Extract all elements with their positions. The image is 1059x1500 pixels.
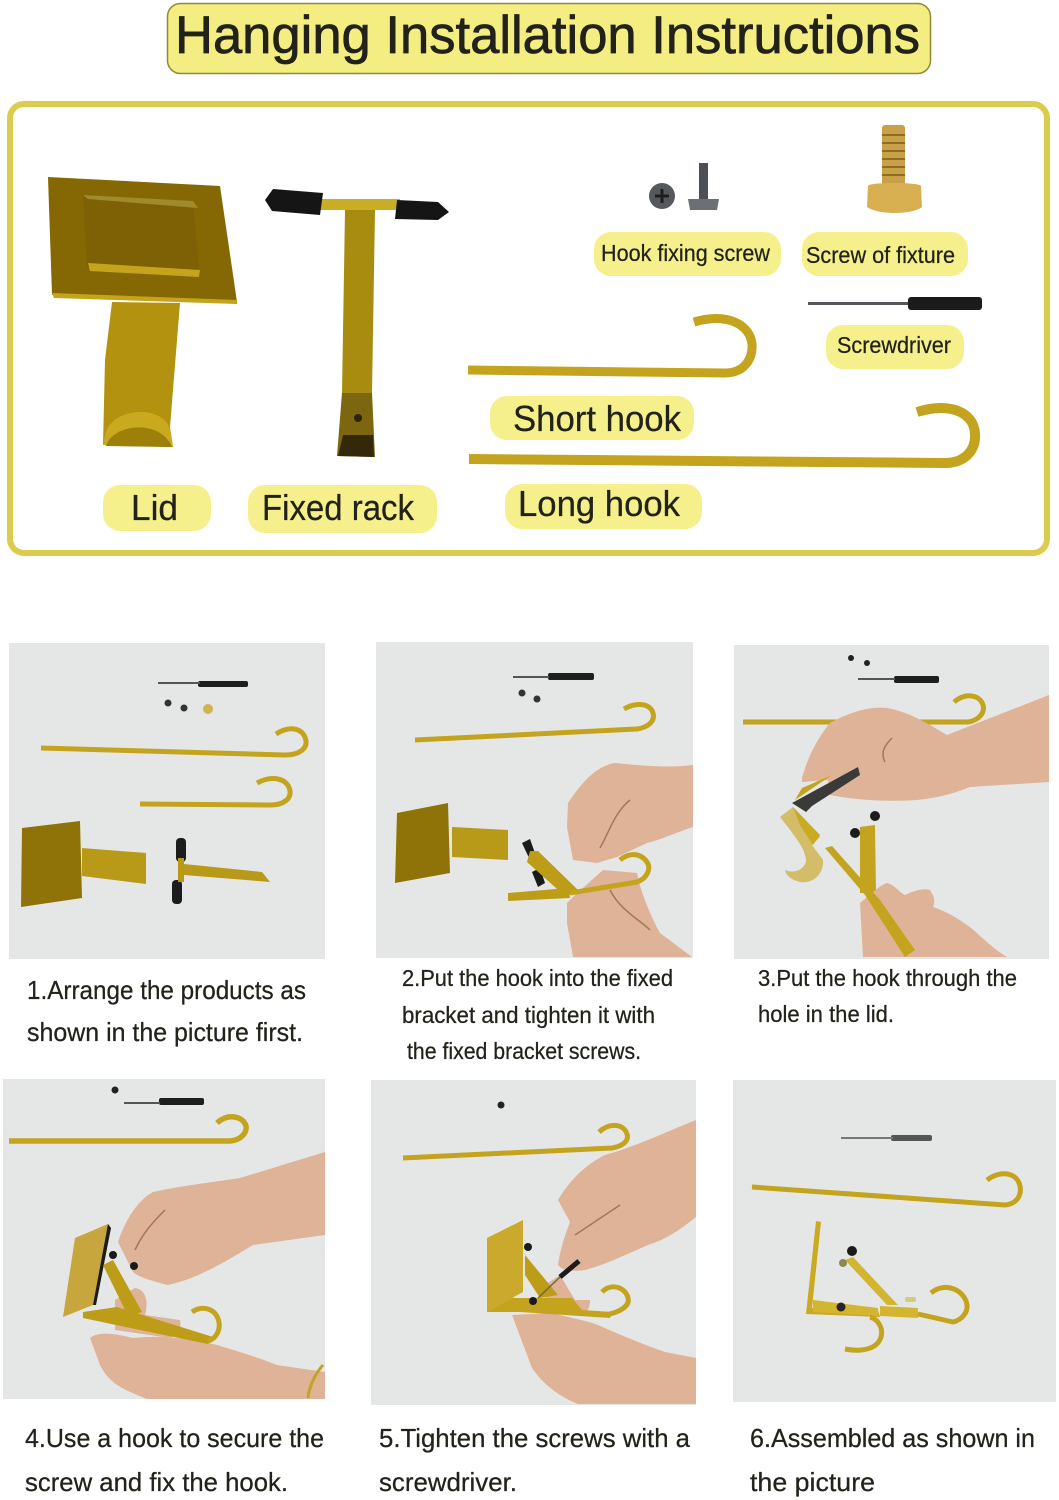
step 1 text bbox=[27, 975, 306, 1047]
step 4 text: 4.Use a hook to secure the bbox=[25, 1423, 324, 1453]
title: Hanging Installation Instructions bbox=[175, 6, 920, 65]
step 1 text: 1.Arrange the products as bbox=[27, 975, 306, 1005]
part: screwdriver bbox=[808, 297, 982, 310]
label: short hook: Short hook bbox=[513, 398, 682, 439]
step 6 text: the picture bbox=[750, 1467, 875, 1497]
panel: step 6 photo bbox=[733, 1080, 1056, 1402]
step 5 text bbox=[379, 1423, 691, 1497]
step 5 text: screwdriver. bbox=[379, 1467, 517, 1497]
label: lid: Lid bbox=[131, 487, 178, 528]
step 6 text bbox=[750, 1423, 1035, 1497]
label: screwdriver: Screwdriver bbox=[837, 332, 951, 358]
part: long hook bbox=[469, 408, 975, 463]
part: lid bbox=[48, 177, 237, 447]
panel: step 1 photo bbox=[9, 643, 325, 959]
step 2 text: bracket and tighten it with bbox=[402, 1002, 655, 1028]
label: hook fixing screw bbox=[594, 232, 781, 276]
step 6 text: 6.Assembled as shown in bbox=[750, 1423, 1035, 1453]
panel: step 2 photo bbox=[376, 642, 693, 958]
panel: step 3 photo bbox=[734, 645, 1049, 959]
step 5 text: 5.Tighten the screws with a bbox=[379, 1423, 691, 1453]
step 2 text: 2.Put the hook into the fixed bbox=[402, 965, 673, 991]
part: screw of fixture bbox=[867, 125, 922, 213]
step 3 text bbox=[758, 965, 1017, 1027]
step 4 text bbox=[25, 1423, 324, 1497]
label: long hook: Long hook bbox=[518, 483, 681, 524]
part: fixed rack bbox=[265, 189, 449, 457]
label: fixed rack: Fixed rack bbox=[262, 487, 415, 528]
panel: step 5 photo bbox=[371, 1080, 696, 1405]
part: hook fixing screw bbox=[649, 163, 719, 210]
label: screwdriver bbox=[826, 325, 964, 369]
label: lid bbox=[103, 485, 211, 531]
step 4 text: screw and fix the hook. bbox=[25, 1467, 288, 1497]
step 3 text: hole in the lid. bbox=[758, 1001, 894, 1027]
panel: parts overview bbox=[10, 104, 1047, 553]
label: hook fixing screw: Hook fixing screw bbox=[601, 240, 770, 266]
label: screw of fixture: Screw of fixture bbox=[806, 242, 955, 268]
step 3 text: 3.Put the hook through the bbox=[758, 965, 1017, 991]
panel: step 4 photo bbox=[3, 1079, 325, 1399]
label: screw of fixture bbox=[802, 232, 968, 276]
step 1 text: shown in the picture first. bbox=[27, 1017, 303, 1047]
part: short hook bbox=[468, 319, 752, 373]
step 2 text bbox=[402, 965, 673, 1064]
step 2 text: the fixed bracket screws. bbox=[407, 1038, 641, 1064]
